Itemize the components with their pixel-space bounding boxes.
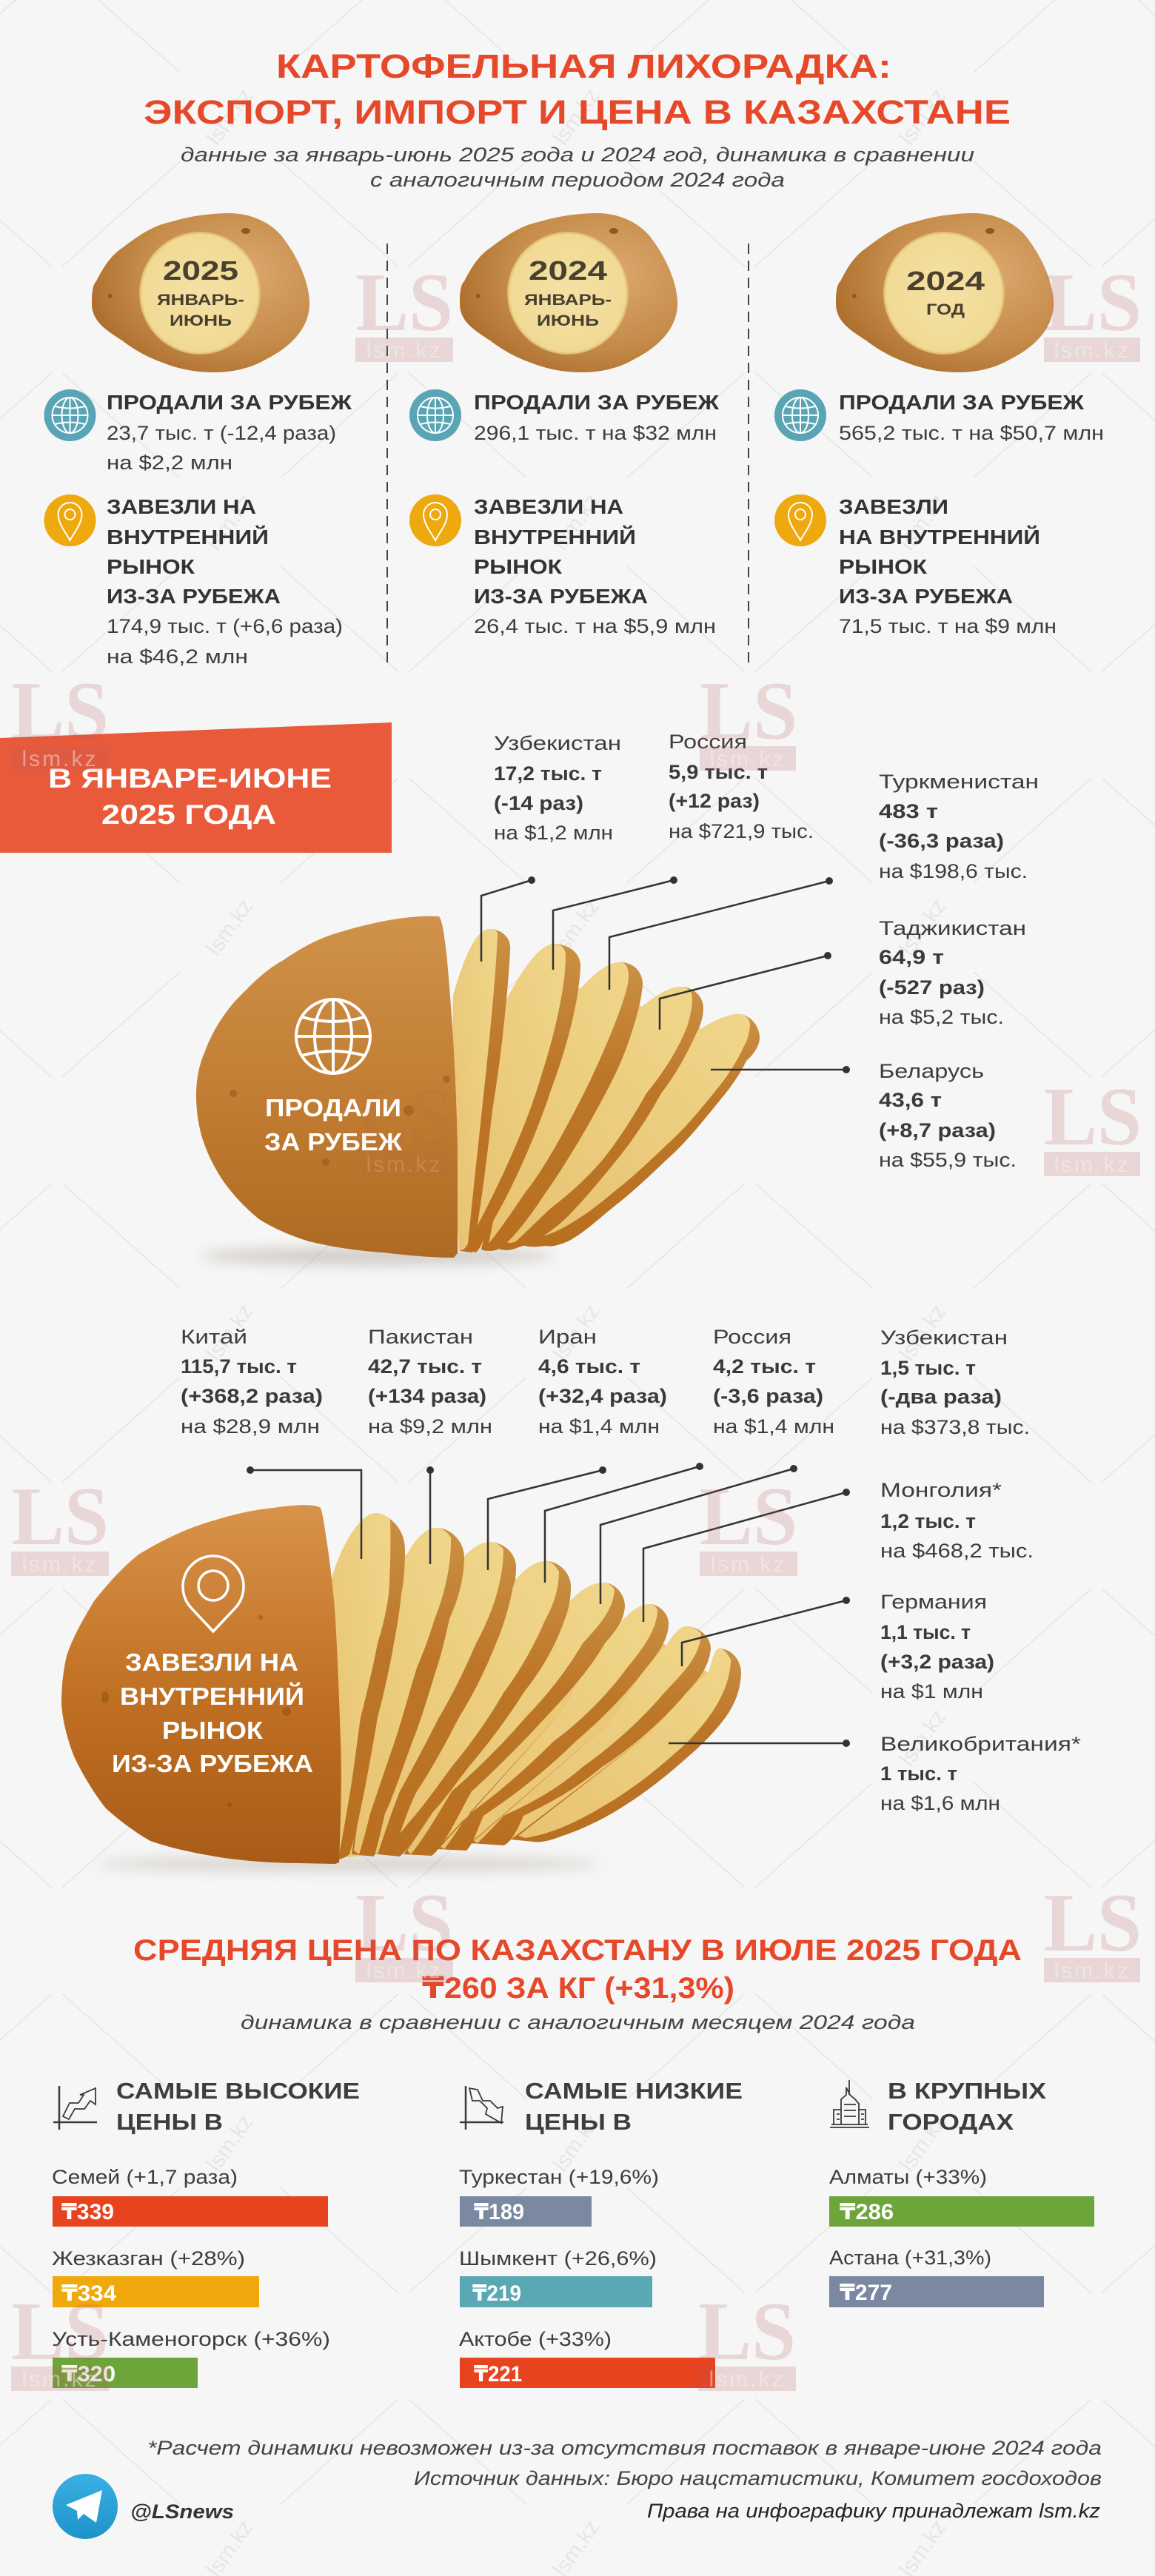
label: Uzbekistan import <box>880 1326 1030 1438</box>
label on potato <box>264 1094 402 1155</box>
label: Russia export: (+12 раз) <box>669 790 760 812</box>
label: Iran import: Иран <box>538 1326 597 1348</box>
label on potato: ИЗ-ЗА РУБЕЖА <box>112 1750 313 1777</box>
label: Uzbekistan import: (-два раза) <box>880 1386 1002 1408</box>
label: Uzbekistan export: (-14 раз) <box>494 792 583 814</box>
label: China import: (+368,2 раза) <box>181 1385 323 1407</box>
label: Uzbekistan export: Узбекистан <box>494 732 621 754</box>
imported text: 71,5 тыс. т на $9 млн <box>839 615 1057 637</box>
column heading: ГОРОДАХ <box>888 2109 1014 2135</box>
label: Pakistan import: Пакистан <box>368 1326 473 1348</box>
bar: Aktobe <box>459 2328 715 2388</box>
label: China import: на $28,9 млн <box>181 1415 320 1438</box>
sold abroad text: ПРОДАЛИ ЗА РУБЕЖ <box>839 391 1085 414</box>
footnotes: Права на инфографику принадлежат lsm.kz <box>647 2500 1101 2522</box>
label: Mongolia import <box>880 1479 1034 1562</box>
watermarks: lsm.kz <box>711 1552 786 1577</box>
label: China import: 115,7 тыс. т <box>181 1355 297 1378</box>
column heading: САМЫЕ ВЫСОКИЕ <box>116 2078 360 2104</box>
label: Great Britain import: на $1,6 млн <box>880 1792 1000 1814</box>
bar: Aktobe: ₸221 <box>474 2362 522 2387</box>
title: КАРТОФЕЛЬНАЯ ЛИХОРАДКА: <box>276 47 891 85</box>
column heading <box>525 2078 743 2135</box>
banner: January-June 2025: 2025 ГОДА <box>101 799 276 830</box>
imported text: 174,9 тыс. т (+6,6 раза) <box>107 615 343 637</box>
title <box>144 47 1011 131</box>
label: Pakistan import <box>368 1326 492 1438</box>
imported text: ИЗ-ЗА РУБЕЖА <box>107 585 281 608</box>
label: China import <box>181 1326 323 1438</box>
column heading <box>116 2078 360 2135</box>
banner: January-June 2025: В ЯНВАРЕ-ИЮНЕ <box>48 763 332 794</box>
label: Russia import: 4,2 тыс. т <box>713 1355 816 1378</box>
bar: Astana <box>829 2247 1044 2307</box>
label: Pakistan import: (+134 раза) <box>368 1385 486 1407</box>
sold abroad text: на $2,2 млн <box>107 452 232 474</box>
icon: pin <box>409 494 461 546</box>
watermarks: lsm.kz <box>366 1153 443 1177</box>
heading: average price: ₸260 ЗА КГ (+31,3%) <box>422 1972 734 2005</box>
label on potato <box>112 1648 313 1777</box>
label: Pakistan import: 42,7 тыс. т <box>368 1355 482 1378</box>
label: Iran import: на $1,4 млн <box>538 1415 660 1438</box>
icon: globe <box>296 999 370 1073</box>
watermarks: lsm.kz <box>1054 1959 1130 1983</box>
label: Tajikistan export: Таджикистан <box>879 917 1026 939</box>
imported text: РЫНОК <box>474 555 563 578</box>
label: Belarus export: Беларусь <box>879 1060 984 1082</box>
label: Russia import: Россия <box>713 1326 791 1348</box>
imported text: ЗАВЕЗЛИ НА <box>474 495 623 518</box>
label: Germany import: (+3,2 раза) <box>880 1651 994 1673</box>
bar: Shymkent <box>459 2247 657 2307</box>
icon: globe <box>44 389 96 441</box>
label: Mongolia import: 1,2 тыс. т <box>880 1510 976 1532</box>
watermarks: LS <box>700 1471 797 1563</box>
icon: potato 2025: 2025 <box>163 255 238 286</box>
watermarks: LS <box>11 665 109 757</box>
label: Uzbekistan export <box>494 732 621 844</box>
imported text: ЗАВЕЗЛИ <box>839 495 948 518</box>
telegram handle: @LSnews <box>130 2500 234 2523</box>
label: Tajikistan export: (-527 раз) <box>879 976 985 999</box>
label: Tajikistan export <box>879 917 1026 1028</box>
watermarks: lsm.kz <box>22 1552 98 1577</box>
icon: potato 2024 year: 2024 <box>906 266 985 296</box>
label: Uzbekistan export: 17,2 тыс. т <box>494 762 602 785</box>
label: Russia export: Россия <box>669 731 747 753</box>
label on potato: ПРОДАЛИ <box>265 1094 401 1121</box>
label: Turkmenistan export: Туркменистан <box>879 771 1039 793</box>
watermarks: lsm.kz <box>366 338 443 363</box>
icon: potato 2024: 2024 <box>529 255 607 286</box>
label: Uzbekistan import: на $373,8 тыс. <box>880 1416 1030 1438</box>
bar: Ust-Kamenogorsk: Усть-Каменогорск (+36%) <box>52 2328 330 2350</box>
icon: pin <box>774 494 826 546</box>
bar: Shymkent: Шымкент (+26,6%) <box>459 2247 657 2270</box>
bar: Turkestan <box>459 2166 659 2227</box>
bar: Almaty: Алматы (+33%) <box>829 2166 987 2188</box>
label: Iran import: 4,6 тыс. т <box>538 1355 640 1378</box>
chart: imported sliced potato <box>61 1505 741 1871</box>
footnotes: *Расчет динамики невозможен из-за отсутствия поставок в январе-июне 2024 года <box>147 2437 1102 2459</box>
column heading: В КРУПНЫХ <box>888 2078 1046 2104</box>
watermarks: LS <box>700 665 797 757</box>
bar: Zhezkazgan: ₸334 <box>61 2281 116 2306</box>
icon: potato 2024: ИЮНЬ <box>537 312 599 329</box>
icon: globe <box>774 389 826 441</box>
subtitle <box>181 144 974 191</box>
bar: Astana: ₸277 <box>840 2281 892 2305</box>
sold abroad text <box>474 391 720 444</box>
sold abroad text: ПРОДАЛИ ЗА РУБЕЖ <box>107 391 352 414</box>
watermarks: LS <box>355 1071 453 1163</box>
subtitle: с аналогичным периодом 2024 года <box>370 169 785 191</box>
label: Mongolia import: на $468,2 тыс. <box>880 1540 1034 1562</box>
label: Iran import <box>538 1326 667 1438</box>
icon: rising chart <box>53 2086 97 2130</box>
label: Great Britain import <box>880 1733 1082 1814</box>
label: Russia export: 5,9 тыс. т <box>669 761 768 783</box>
label: Russia import <box>713 1326 834 1438</box>
panel: large cities <box>829 2078 1094 2307</box>
icon: pin <box>183 1556 244 1631</box>
icon: globe <box>409 389 461 441</box>
icon: potato 2024 year <box>836 213 1054 372</box>
watermarks: lsm.kz <box>1054 338 1130 363</box>
bar: Semey: ₸339 <box>61 2200 114 2224</box>
watermarks: LS <box>355 1877 453 1969</box>
label: Mongolia import: Монголия* <box>880 1479 1002 1501</box>
label: Russia import: (-3,6 раза) <box>713 1385 823 1407</box>
panel: highest prices <box>52 2078 360 2388</box>
icon: pin <box>44 494 96 546</box>
watermarks: LS <box>11 1471 109 1563</box>
imported text: 26,4 тыс. т на $5,9 млн <box>474 615 716 637</box>
label: Turkmenistan export: на $198,6 тыс. <box>879 860 1028 882</box>
connectors: imported <box>247 1463 850 1747</box>
label: Germany import <box>880 1591 994 1703</box>
label: Great Britain import: 1 тыс. т <box>880 1762 957 1785</box>
sold abroad text: 565,2 тыс. т на $50,7 млн <box>839 422 1104 444</box>
label: Germany import: на $1 млн <box>880 1680 983 1703</box>
icon: falling chart <box>460 2086 503 2130</box>
column heading: ЦЕНЫ В <box>116 2109 223 2135</box>
heading: average price <box>133 1934 1022 2033</box>
watermarks: lsm.kz <box>22 747 98 771</box>
sold abroad text: 296,1 тыс. т на $32 млн <box>474 422 717 444</box>
bar: Shymkent: ₸219 <box>472 2281 521 2306</box>
imported text <box>474 495 716 637</box>
watermarks: lsm.kz <box>1054 1153 1130 1177</box>
icon: potato 2024 <box>460 213 677 372</box>
watermarks: LS <box>698 2286 796 2378</box>
watermarks: lsm.kz <box>709 2367 785 2392</box>
bar: Ust-Kamenogorsk: ₸320 <box>61 2362 116 2387</box>
label: Germany import: 1,1 тыс. т <box>880 1621 971 1643</box>
label: Uzbekistan import: Узбекистан <box>880 1326 1008 1349</box>
imported text: НА ВНУТРЕННИЙ <box>839 525 1040 549</box>
icon: potato 2024: ЯНВАРЬ- <box>524 292 612 309</box>
icon: skyscraper <box>830 2080 869 2127</box>
subtitle: данные за январь-июнь 2025 года и 2024 год, динамика в сравнении <box>181 144 974 166</box>
icon: telegram <box>53 2474 118 2539</box>
watermarks: LS <box>1044 1071 1142 1163</box>
sold abroad text <box>839 391 1104 444</box>
column dividers <box>387 244 749 668</box>
icon: potato 2024 year: ГОД <box>926 301 965 318</box>
watermarks: LS <box>11 2286 109 2378</box>
imported text: ЗАВЕЗЛИ НА <box>107 495 256 518</box>
label on potato: РЫНОК <box>162 1717 264 1744</box>
sold abroad text <box>107 391 352 474</box>
footnotes <box>147 2437 1102 2522</box>
label: Pakistan import: на $9,2 млн <box>368 1415 492 1438</box>
sold abroad text: 23,7 тыс. т (-12,4 раза) <box>107 422 336 444</box>
column heading: САМЫЕ НИЗКИЕ <box>525 2078 743 2104</box>
watermarks: LS <box>355 257 453 349</box>
sold abroad text: ПРОДАЛИ ЗА РУБЕЖ <box>474 391 720 414</box>
panel: 2025 January-June <box>44 213 352 668</box>
panel: lowest prices <box>459 2078 743 2388</box>
label on potato: ВНУТРЕННИЙ <box>120 1682 304 1710</box>
heading: average price: динамика в сравнении с аналогичным месяцем 2024 года <box>241 2011 915 2033</box>
heading: average price: СРЕДНЯЯ ЦЕНА ПО КАЗАХСТАНУ В ИЮЛЕ 2025 ГОДА <box>133 1934 1022 1967</box>
label on potato: ЗА РУБЕЖ <box>264 1128 402 1155</box>
bar: Almaty: ₸286 <box>840 2200 894 2224</box>
label: Iran import: (+32,4 раза) <box>538 1385 667 1407</box>
imported text <box>839 495 1057 637</box>
label: Belarus export: 43,6 т <box>879 1089 942 1111</box>
watermarks: LS <box>1044 1877 1142 1969</box>
label: Turkmenistan export: (-36,3 раза) <box>879 830 1004 852</box>
label: Russia import: на $1,4 млн <box>713 1415 834 1438</box>
label: Germany import: Германия <box>880 1591 987 1613</box>
label: Uzbekistan export: на $1,2 млн <box>494 822 613 844</box>
chart: sold abroad sliced potato <box>196 916 760 1264</box>
label: Belarus export: (+8,7 раза) <box>879 1119 996 1141</box>
imported text: ВНУТРЕННИЙ <box>107 525 269 549</box>
bar: Semey <box>52 2166 328 2227</box>
column heading <box>888 2078 1046 2135</box>
icon: potato 2025: ИЮНЬ <box>170 312 232 329</box>
imported text: ИЗ-ЗА РУБЕЖА <box>839 585 1013 608</box>
panel: 2024 full year <box>774 213 1104 637</box>
label: China import: Китай <box>181 1326 247 1348</box>
connectors: sold abroad <box>481 876 850 1073</box>
bar: Zhezkazgan: Жезказган (+28%) <box>52 2247 245 2270</box>
bar: Almaty <box>829 2166 1094 2227</box>
bar: Ust-Kamenogorsk <box>52 2328 330 2388</box>
label: Belarus export <box>879 1060 1017 1171</box>
bar: Semey: Семей (+1,7 раза) <box>52 2166 238 2188</box>
label: Russia export: на $721,9 тыс. <box>669 820 814 842</box>
column heading: ЦЕНЫ В <box>525 2109 632 2135</box>
watermarks: lsm.kz <box>709 747 786 771</box>
bar: Astana: Астана (+31,3%) <box>829 2247 991 2269</box>
imported text <box>107 495 343 668</box>
icon: potato 2025: ЯНВАРЬ- <box>157 292 244 309</box>
bar: Turkestan: Туркестан (+19,6%) <box>459 2166 659 2188</box>
label: Belarus export: на $55,9 тыс. <box>879 1149 1017 1171</box>
bar: Aktobe: Актобе (+33%) <box>459 2328 612 2350</box>
imported text: РЫНОК <box>839 555 928 578</box>
label: Turkmenistan export: 483 т <box>879 800 938 822</box>
title: ЭКСПОРТ, ИМПОРТ И ЦЕНА В КАЗАХСТАНЕ <box>144 93 1011 131</box>
label: Russia export <box>669 731 814 842</box>
banner: January-June 2025 <box>0 722 392 853</box>
label: Uzbekistan import: 1,5 тыс. т <box>880 1357 976 1379</box>
label: Turkmenistan export <box>879 771 1039 882</box>
watermarks: lsm.kz <box>366 1959 443 1983</box>
imported text: ИЗ-ЗА РУБЕЖА <box>474 585 648 608</box>
watermarks: LS <box>1044 257 1142 349</box>
icon: potato 2025 <box>92 213 309 372</box>
label on potato: ЗАВЕЗЛИ НА <box>125 1648 298 1676</box>
watermarks: lsm.kz <box>22 2367 98 2392</box>
imported text: на $46,2 млн <box>107 645 248 668</box>
bar: Turkestan: ₸189 <box>474 2200 524 2224</box>
imported text: ВНУТРЕННИЙ <box>474 525 636 549</box>
label: Tajikistan export: на $5,2 тыс. <box>879 1006 1004 1028</box>
label: Great Britain import: Великобритания* <box>880 1733 1082 1755</box>
footnotes: Источник данных: Бюро нацстатистики, Комитет госдоходов <box>414 2467 1102 2489</box>
panel: 2024 January-June <box>409 213 720 637</box>
imported text: РЫНОК <box>107 555 195 578</box>
bar: Zhezkazgan <box>52 2247 259 2307</box>
label: Tajikistan export: 64,9 т <box>879 946 944 968</box>
